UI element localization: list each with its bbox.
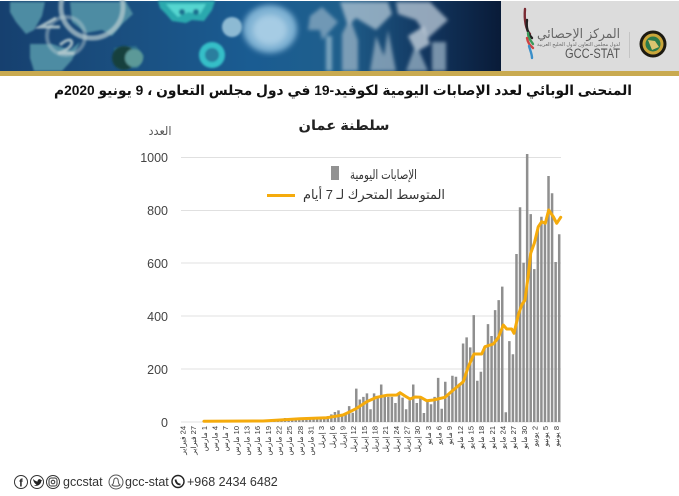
icon: snapchat xyxy=(109,475,123,489)
logo ribbon xyxy=(525,9,533,58)
y axis labels: 200 xyxy=(147,363,168,377)
x axis date labels: 15 مايو xyxy=(466,426,476,450)
y axis labels: 600 xyxy=(147,257,168,271)
x axis date labels: 8 يونيو xyxy=(552,426,561,447)
x axis date labels: 7 مارس xyxy=(221,426,230,451)
legend label: daily cases: الإصابات اليومية xyxy=(350,167,417,183)
gold strip xyxy=(0,71,679,76)
x axis date labels: 22 مارس xyxy=(274,426,284,456)
x axis date labels: 27 إبريل xyxy=(402,426,412,453)
bars: daily cases xyxy=(203,154,559,422)
x axis date labels: 18 مايو xyxy=(477,426,486,450)
x axis date labels: 9 مايو xyxy=(445,426,454,446)
x axis date labels: 27 فبراير xyxy=(189,426,198,456)
GCC emblem xyxy=(640,30,666,58)
handle: gccstat: gccstat xyxy=(63,475,103,489)
x axis date labels: 28 مارس xyxy=(296,426,305,456)
x axis date labels: 27 مايو xyxy=(509,426,518,450)
x axis date labels: 3 إبريل xyxy=(317,426,326,448)
virus: teal top xyxy=(158,1,215,23)
y axis labels: 800 xyxy=(147,204,168,218)
x axis date labels: 16 مارس xyxy=(253,426,262,456)
city skyline and arrows xyxy=(308,2,448,71)
virus: pale small xyxy=(222,17,242,37)
logo divider xyxy=(629,32,630,58)
header banner xyxy=(0,0,679,71)
y axis labels: 400 xyxy=(147,310,168,324)
y axis labels xyxy=(140,151,168,430)
icon: facebook: f xyxy=(19,478,23,490)
icon: instagram xyxy=(46,476,60,488)
x axis date labels: 9 إبريل xyxy=(338,426,348,448)
x axis date labels: 13 مارس xyxy=(242,426,252,456)
x axis date labels: 24 فبراير xyxy=(178,426,188,456)
logo panel xyxy=(501,1,679,71)
x axis date labels: 21 إبريل xyxy=(381,426,390,453)
x axis date labels: 1 مارس xyxy=(200,426,209,451)
x axis date labels: 21 مايو xyxy=(488,426,497,450)
logo arabic name: المركز الإحصائي xyxy=(537,26,620,42)
legend swatch: daily cases xyxy=(331,166,339,180)
x axis date labels: 12 مايو xyxy=(456,426,465,450)
y axis labels: 0 xyxy=(161,416,168,430)
subtitle: country: سلطنة عمان xyxy=(298,117,390,133)
x axis date labels: 31 مارس xyxy=(306,426,316,456)
virus: cyan xyxy=(199,42,225,68)
x axis date labels: 6 مايو xyxy=(434,426,444,446)
icon: whatsapp xyxy=(172,476,184,488)
ring and number 2 graphic xyxy=(40,0,123,55)
grid lines xyxy=(181,158,561,422)
y axis labels: 1000 xyxy=(140,151,168,165)
virus: pale large xyxy=(243,5,297,53)
title: المنحنى الوبائي لعدد الإصابات اليومية لكوفيد-19 في دول مجلس التعاون ، 9 يونيو 2020م xyxy=(54,82,632,99)
world map xyxy=(10,2,144,71)
footer contacts xyxy=(14,475,278,490)
x axis date labels: 30 إبريل xyxy=(413,426,422,453)
icon: twitter xyxy=(30,476,44,488)
x axis date labels: 30 مايو xyxy=(520,426,529,450)
x axis date labels: 2 يونيو xyxy=(530,426,540,447)
legend swatch: moving average xyxy=(267,194,295,197)
x axis date labels: 18 إبريل xyxy=(370,426,380,453)
x axis date labels: 5 يونيو xyxy=(541,426,550,447)
x axis date labels: 25 مارس xyxy=(285,426,294,456)
x axis date labels: 19 مارس xyxy=(264,426,273,456)
y axis title: العدد xyxy=(148,124,172,138)
x axis date labels: 3 مايو xyxy=(424,426,433,446)
icon: facebook xyxy=(14,476,28,490)
x axis date labels: 6 إبريل xyxy=(328,426,337,448)
x axis date labels: 4 مارس xyxy=(210,426,220,451)
x axis date labels: 24 مايو xyxy=(498,426,508,450)
legend xyxy=(267,166,445,203)
x axis date labels: 12 إبريل xyxy=(349,426,358,453)
x axis date labels: 15 إبريل xyxy=(360,426,369,453)
x axis date labels xyxy=(178,426,561,456)
virus: dark xyxy=(112,46,143,70)
line: 7-day moving average xyxy=(204,210,561,421)
logo english name: GCC-STAT xyxy=(565,46,620,61)
chart xyxy=(140,151,561,456)
x axis date labels: 24 إبريل xyxy=(392,426,401,453)
logo arabic subtitle: لدول مجلس التعاون لدول الخليج العربية xyxy=(537,42,620,48)
x axis date labels: 10 مارس xyxy=(232,426,241,456)
phone number: +968 2434 6482 xyxy=(187,475,278,489)
legend label: moving average: المتوسط المتحرك لـ 7 أيام xyxy=(303,186,445,203)
banner background xyxy=(0,1,501,71)
handle: gcc-stat: gcc-stat xyxy=(125,475,169,489)
